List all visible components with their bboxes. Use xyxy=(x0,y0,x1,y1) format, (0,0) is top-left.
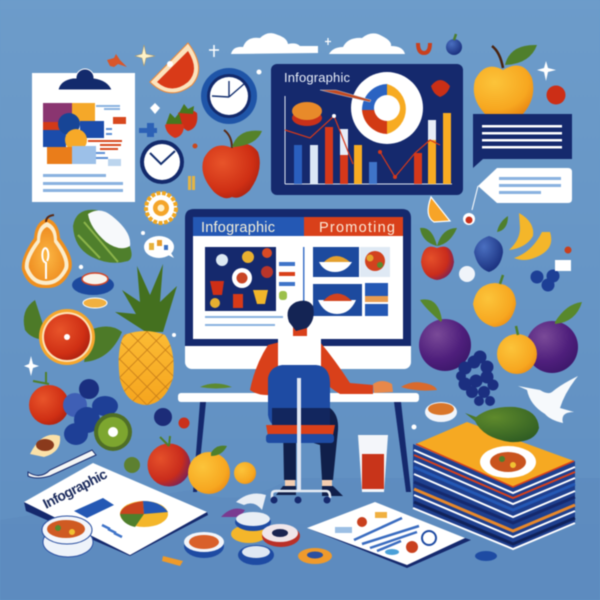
monitor header blue: Infographic xyxy=(201,220,275,236)
white dot xyxy=(256,70,262,74)
peach xyxy=(148,436,190,486)
food dish xyxy=(292,102,322,126)
grapefruit xyxy=(24,300,122,365)
pencil xyxy=(320,90,371,102)
orange chip xyxy=(162,556,183,566)
tape measure xyxy=(28,450,96,478)
desk fruit left xyxy=(200,384,232,388)
sparkle gold xyxy=(135,45,155,66)
document ticks xyxy=(102,525,122,537)
apple leaf xyxy=(232,131,262,147)
book stack xyxy=(413,422,575,549)
shoes xyxy=(276,486,343,496)
small label tag xyxy=(555,260,571,271)
callout pin xyxy=(463,186,478,225)
bowl with salad xyxy=(425,402,457,422)
stripes xyxy=(413,450,575,549)
yellow bars xyxy=(188,176,195,190)
golden apple xyxy=(474,45,537,114)
screen image: salad xyxy=(360,247,390,277)
cover plate xyxy=(480,446,536,478)
plus icon xyxy=(139,123,157,137)
sparkle cross xyxy=(209,45,219,57)
coconut xyxy=(73,210,132,263)
orange fruit xyxy=(497,326,537,374)
blue tin xyxy=(72,273,114,295)
avocado xyxy=(465,407,539,442)
purple plum left xyxy=(419,299,471,371)
desk fruit right xyxy=(401,382,437,391)
olive xyxy=(124,457,140,473)
trend line xyxy=(285,116,440,177)
small ornament: orange bow xyxy=(107,54,127,67)
yellow fruit xyxy=(473,275,516,327)
legs xyxy=(283,408,338,480)
lower document icons xyxy=(335,512,436,555)
cherry xyxy=(546,86,566,104)
screen divider xyxy=(303,247,304,332)
left apple xyxy=(29,372,69,425)
kiwi xyxy=(94,413,132,451)
axis xyxy=(285,96,452,184)
glass of juice xyxy=(358,435,388,492)
bowl with measuring tape xyxy=(42,516,93,557)
lid stack xyxy=(231,512,274,565)
red apple with leaves xyxy=(420,228,457,280)
bananas xyxy=(509,213,551,260)
white speech bubble xyxy=(478,168,572,203)
fruit: small red u xyxy=(418,43,430,53)
screen small tag xyxy=(365,283,388,316)
lower document xyxy=(307,502,471,568)
bars xyxy=(294,113,451,184)
cloud left xyxy=(231,33,318,54)
small orange xyxy=(234,462,256,484)
tape ring small xyxy=(298,548,332,564)
tape coil xyxy=(236,494,266,510)
shirt xyxy=(278,335,321,395)
orange wedge xyxy=(428,197,450,222)
socks xyxy=(285,480,332,486)
tomato icon xyxy=(431,80,450,97)
lower document lines xyxy=(354,518,419,551)
arm right xyxy=(312,342,373,394)
nut xyxy=(30,435,60,457)
screen image: veg xyxy=(313,284,362,316)
red dot xyxy=(564,246,572,254)
clipboard side labels xyxy=(88,106,126,166)
document pie xyxy=(120,501,168,527)
purple plum right xyxy=(526,302,582,373)
clipboard clip xyxy=(58,69,112,90)
orange xyxy=(188,446,230,494)
food plate xyxy=(184,532,224,558)
desk xyxy=(178,393,419,492)
grape cluster xyxy=(456,350,498,406)
monitor header red: Promoting xyxy=(319,220,395,236)
neck xyxy=(293,327,307,336)
bird xyxy=(518,376,578,423)
sparkle diamond xyxy=(150,103,160,114)
sparkle xyxy=(24,356,39,376)
chart panel title: Infographic xyxy=(284,70,350,85)
food speech bubble xyxy=(144,236,174,258)
small dark berry xyxy=(154,408,172,426)
red apple xyxy=(202,130,262,198)
screen lines under panel xyxy=(205,316,283,326)
navy speech box xyxy=(473,114,572,168)
dots xyxy=(79,231,176,337)
pear xyxy=(22,215,72,288)
document title: Infographic xyxy=(40,466,110,512)
clipboard text lines xyxy=(43,174,123,192)
screen image: bowl xyxy=(313,247,359,277)
gold lid xyxy=(83,298,107,308)
blue pebble xyxy=(475,551,497,561)
clipboard document xyxy=(32,69,135,202)
blueberry cluster xyxy=(530,270,560,292)
blueberries clump xyxy=(63,379,118,445)
monitor header blue xyxy=(193,217,304,236)
top cover xyxy=(416,422,574,487)
seal xyxy=(459,266,475,282)
screen small bars xyxy=(279,262,295,300)
person xyxy=(250,301,393,496)
red dot xyxy=(192,144,198,148)
monitor header red xyxy=(304,217,403,236)
document infographic xyxy=(24,463,208,556)
screen food panel xyxy=(205,247,276,311)
document blue tag xyxy=(74,498,114,518)
pie ring chart xyxy=(351,72,423,144)
chair xyxy=(266,365,335,504)
white dot xyxy=(412,424,416,430)
purple fold xyxy=(221,509,245,517)
hand xyxy=(373,381,393,393)
cloud right xyxy=(329,33,405,54)
sparkle cross right xyxy=(325,38,331,45)
head xyxy=(288,301,314,331)
floor shadow xyxy=(0,478,600,600)
clock lower xyxy=(140,140,184,184)
pineapple xyxy=(115,264,177,405)
strawberries xyxy=(165,104,197,138)
chart panel xyxy=(271,64,463,195)
tangerine wedge xyxy=(150,43,199,93)
small blueberry xyxy=(446,34,462,55)
sparkle xyxy=(537,61,556,81)
small red berry xyxy=(178,418,190,428)
clipboard colour blocks xyxy=(43,103,104,164)
monitor xyxy=(185,209,411,369)
dark plum xyxy=(474,216,508,272)
clock top xyxy=(201,68,257,124)
gear badge xyxy=(145,192,177,224)
arm left xyxy=(250,342,282,395)
tape ring xyxy=(262,524,300,547)
